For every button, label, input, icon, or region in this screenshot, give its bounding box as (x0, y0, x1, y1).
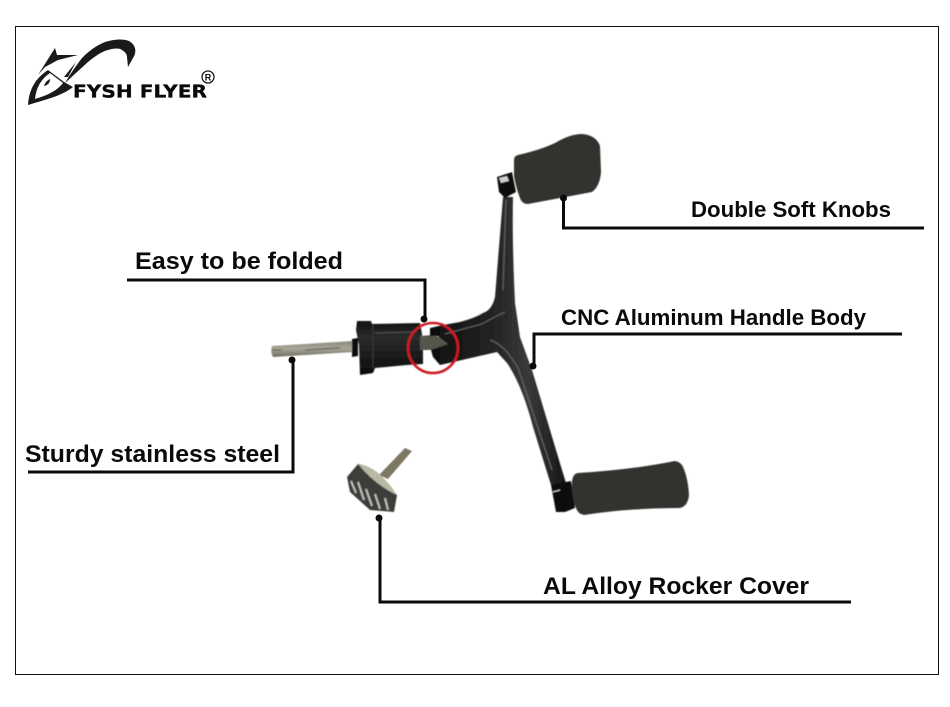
rocker cover (347, 448, 412, 512)
callout: Easy to be folded (127, 248, 428, 322)
cover knurl marks (351, 481, 388, 510)
bottom bracket (551, 481, 575, 512)
callout: Double Soft Knobs: Double Soft Knobs (691, 197, 891, 222)
logo: Fysh Flyer (28, 39, 214, 105)
logo registered mark: R (205, 72, 212, 82)
logo registered mark (202, 71, 214, 83)
cover pin (379, 448, 412, 479)
steel shaft (271, 341, 354, 357)
product photo: folding handle (271, 134, 689, 515)
red highlight circle (408, 323, 458, 373)
handle highlight (445, 200, 552, 470)
upper soft knob (514, 134, 601, 204)
cover top face (358, 464, 397, 495)
handle body (430, 197, 566, 485)
top bracket (497, 172, 516, 198)
lower soft knob (572, 461, 689, 515)
callout: Easy to be folded: Easy to be folded (135, 248, 343, 275)
callout: AL Alloy Rocker Cover (376, 514, 851, 602)
callout: AL Alloy Rocker Cover: AL Alloy Rocker Cover (543, 573, 809, 600)
collar and barrel (352, 321, 423, 375)
logo icon: fish and hook (28, 39, 135, 105)
cover knurled disc (347, 464, 397, 512)
callout: CNC Aluminum Handle Body: CNC Aluminum Handle Body (561, 305, 867, 330)
callout: Sturdy stainless steel (25, 356, 296, 472)
callout: Sturdy stainless steel: Sturdy stainless steel (25, 441, 280, 468)
hinge neck (420, 335, 450, 350)
logo wordmark: FYSH FLYER (73, 82, 207, 102)
callout: Double Soft Knobs (560, 194, 924, 228)
callout: CNC Aluminum Handle Body (530, 305, 902, 370)
